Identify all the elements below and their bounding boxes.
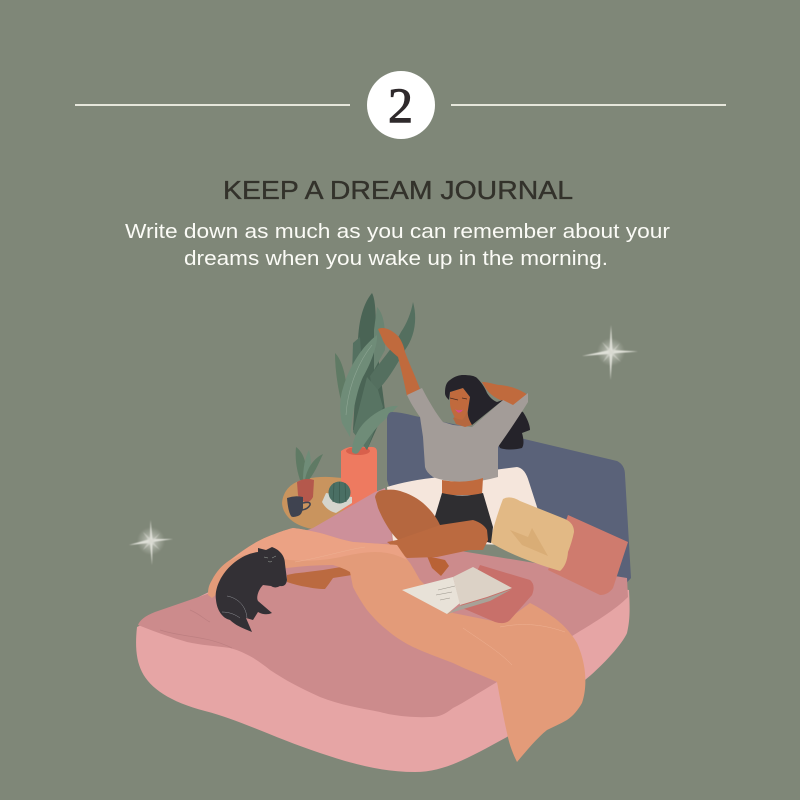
headboard	[387, 412, 631, 590]
title: KEEP A DREAM JOURNAL	[223, 177, 573, 205]
header divider right	[451, 104, 726, 106]
midriff	[442, 478, 483, 495]
description: dreams when you wake up in the morning.	[184, 247, 608, 270]
raised arm	[378, 328, 421, 396]
potted snake plant	[335, 293, 415, 510]
coffee mug	[287, 496, 310, 517]
header divider left	[75, 104, 350, 106]
mattress side	[136, 560, 630, 772]
hair	[445, 375, 503, 425]
shorts	[433, 493, 493, 543]
white pillow	[387, 467, 538, 545]
far foot	[287, 566, 352, 589]
salmon pillow	[548, 515, 628, 595]
hair back lobe	[497, 405, 530, 450]
small potted plant	[296, 447, 323, 502]
mattress top	[138, 488, 628, 717]
cactus on plate	[322, 482, 352, 513]
side table	[282, 477, 350, 529]
book pillow	[460, 565, 534, 623]
crossed thigh	[387, 520, 488, 558]
number badge: 2	[388, 77, 413, 133]
mauve pillow	[300, 488, 392, 546]
illustration: woman waking in bed	[136, 293, 631, 772]
blanket	[208, 528, 585, 762]
sparkle right	[582, 325, 638, 380]
neck and face	[450, 388, 472, 427]
description: Write down as much as you can remember about your	[125, 220, 670, 243]
number badge	[367, 71, 435, 139]
cat	[216, 547, 287, 632]
open book	[402, 567, 512, 614]
mattress wrinkles	[160, 610, 232, 648]
description	[125, 220, 670, 270]
lower foot	[427, 556, 449, 576]
sweater	[407, 388, 528, 482]
upper thigh	[375, 490, 440, 552]
sparkle left	[129, 520, 173, 565]
yellow pillow	[490, 497, 574, 571]
bent arm	[482, 382, 527, 406]
